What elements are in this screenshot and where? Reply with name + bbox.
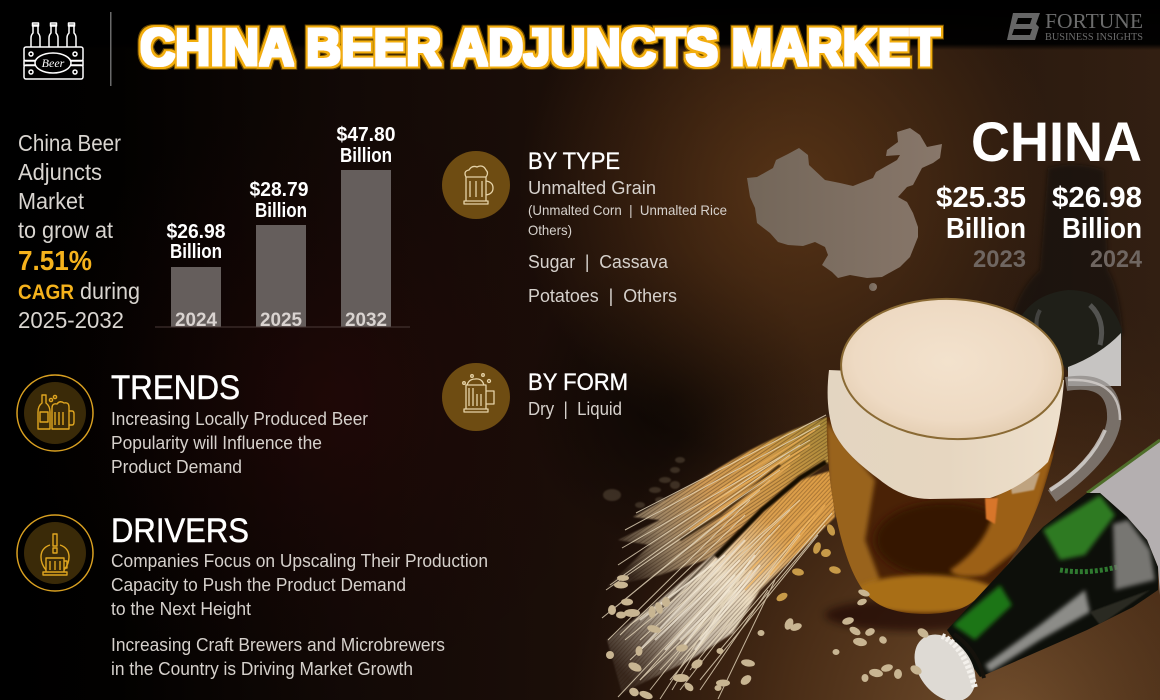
photo: barley grains — [603, 457, 930, 700]
text block: CAGR statement: Market — [18, 188, 85, 214]
panel: by type: Unmalted Grain — [528, 178, 656, 198]
bar 2025: Billion — [255, 200, 307, 222]
panel: by type — [442, 148, 727, 306]
bar 2024: $26.98 — [166, 221, 226, 243]
bar 2025 — [250, 179, 308, 331]
panel: trends — [17, 369, 368, 477]
photo: back beer bottle — [1007, 164, 1123, 386]
text block: CAGR statement: CAGR — [18, 281, 74, 304]
value 2024: 2024 — [1090, 246, 1143, 273]
panel: drivers: DRIVERS — [111, 512, 249, 550]
text block: CAGR statement: to grow at — [18, 217, 114, 243]
value 2023 — [936, 182, 1026, 273]
value 2024: Billion — [1062, 213, 1142, 245]
bar 2032: Billion — [340, 145, 392, 167]
panel: by form: BY FORM — [528, 369, 628, 396]
logo: Fortune Business Insights: BUSINESS INSIGHTS — [1045, 32, 1143, 43]
panel: China market values: CHINA — [971, 110, 1142, 173]
panel: by type: BY TYPE — [528, 148, 620, 175]
icon: beer mug — [442, 151, 510, 219]
photo: front green bottle — [902, 440, 1160, 700]
bar 2024 — [166, 221, 226, 331]
panel: by type: (Unmalted Corn | Unmalted Rice — [528, 202, 727, 218]
map: China — [747, 128, 942, 291]
panel: by type: Sugar | Cassava — [528, 252, 669, 272]
text block: CAGR statement: China Beer — [18, 130, 121, 156]
panel: drivers: Increasing Craft Brewers and Microbrewers — [111, 635, 445, 655]
photo: wheat stalks — [602, 415, 835, 699]
value 2023: 2023 — [973, 246, 1026, 273]
text block: CAGR statement: 2025-2032 — [18, 307, 124, 333]
value 2024: $26.98 — [1052, 182, 1142, 214]
bottle label — [1087, 442, 1160, 595]
panel: drivers: Companies Focus on Upscaling Their Production — [111, 551, 488, 571]
bar 2024: Billion — [170, 241, 222, 263]
value 2023: $25.35 — [936, 182, 1026, 214]
panel: drivers: in the Country is Driving Market Growth — [111, 659, 413, 679]
panel: trends: TRENDS — [111, 369, 240, 407]
text block: CAGR statement — [18, 130, 140, 333]
bottle glass — [947, 493, 1158, 677]
panel: drivers: Capacity to Push the Product Demand — [111, 575, 406, 595]
upper ear — [607, 417, 832, 587]
panel: by form — [442, 363, 628, 431]
value 2024 — [1052, 182, 1143, 273]
bottle cap — [902, 623, 988, 700]
panel: China market values — [936, 110, 1143, 273]
icon: bottle and mug — [17, 375, 93, 451]
icon: beer tap — [17, 515, 93, 591]
logo: Fortune Business Insights — [1007, 9, 1143, 43]
bar 2025: $28.79 — [250, 179, 308, 201]
icon: beer crate logo: Beer — [42, 56, 65, 70]
panel: by form: Dry | Liquid — [528, 399, 622, 419]
text block: CAGR statement: 7.51% — [18, 245, 92, 276]
text block: CAGR statement: during — [80, 278, 140, 304]
panel: by type: Potatoes | Others — [528, 286, 677, 306]
bar 2032: 2032 — [345, 310, 387, 331]
beer body — [826, 417, 1060, 614]
value 2023: Billion — [946, 213, 1026, 245]
panel: drivers: to the Next Height — [111, 599, 251, 619]
panel: drivers — [17, 512, 488, 679]
bar 2025: 2025 — [260, 310, 302, 331]
lower ear — [607, 470, 835, 693]
panel: by type: Others) — [528, 222, 572, 238]
bar 2032 — [336, 124, 396, 331]
shadow under mug — [825, 599, 1005, 631]
bar 2024: 2024 — [175, 310, 217, 331]
mug foam band — [828, 370, 1064, 499]
header divider — [110, 12, 112, 86]
title: CHINA BEER ADJUNCTS MARKET — [140, 19, 940, 77]
icon: foaming stein — [442, 363, 510, 431]
panel: trends: Popularity will Influence the — [111, 433, 322, 453]
panel: trends: Increasing Locally Produced Beer — [111, 409, 368, 429]
bar 2032: $47.80 — [336, 124, 396, 146]
icon: beer crate logo — [24, 23, 83, 79]
photo: beer mug — [820, 293, 1120, 631]
panel: trends: Product Demand — [111, 457, 242, 477]
bar chart: market size — [155, 124, 410, 331]
logo: Fortune Business Insights: FORTUNE — [1045, 9, 1143, 33]
mug handle — [1050, 380, 1120, 496]
text block: CAGR statement: Adjuncts — [18, 159, 102, 185]
foam top — [837, 293, 1067, 445]
